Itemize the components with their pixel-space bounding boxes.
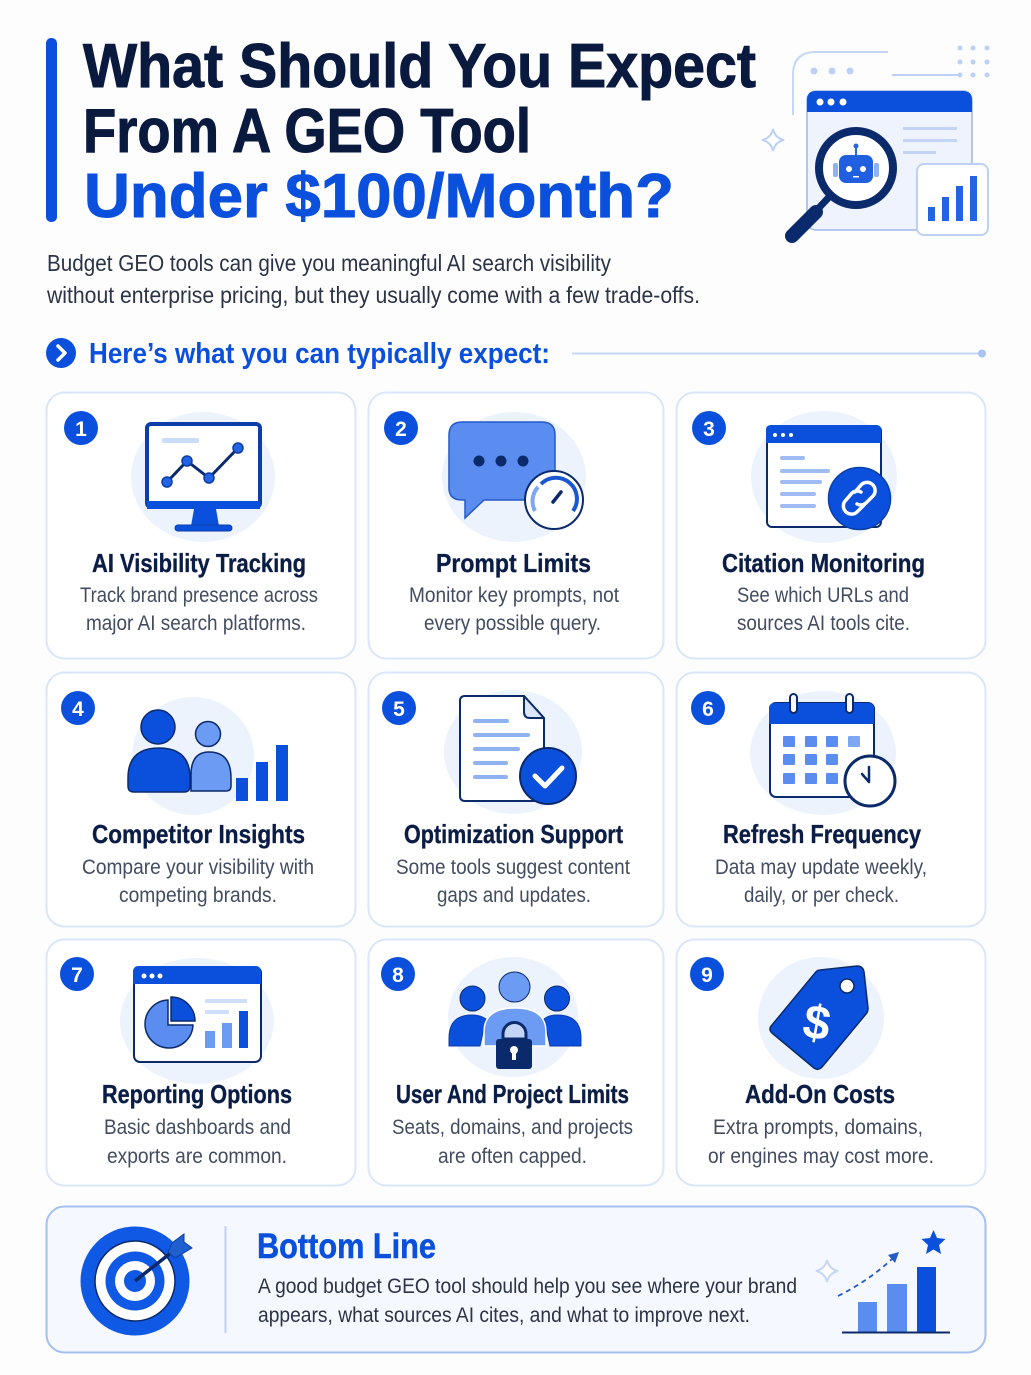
card 3 title: Citation Monitoring [722,548,925,578]
card 7 title: Reporting Options [102,1079,292,1109]
card 6 description: daily, or per check. [744,884,899,907]
badge 8: 8 [392,964,404,987]
badge 5 [382,691,416,725]
card 1 title: AI Visibility Tracking [92,548,306,578]
badge 6: 6 [702,698,714,721]
icon: page and link [751,411,897,543]
card 7 description: exports are common. [107,1145,287,1168]
badge 3: 3 [703,418,715,441]
card 9 description: or engines may cost more. [708,1145,934,1168]
icon: chat and gauge [442,412,586,542]
title: From A GEO Tool [83,97,531,166]
panel: card 7 [46,940,356,1186]
badge 8 [381,957,415,991]
icon: report window [120,958,274,1084]
card 2 description: every possible query. [424,612,601,635]
card 7 description [104,1116,291,1168]
card 5 description: gaps and updates. [437,884,591,907]
card 5 description: Some tools suggest content [396,856,630,879]
icon: document check [444,690,582,814]
section heading [46,338,986,370]
icon: team and lock [448,957,581,1077]
icon: growth bars [816,1230,950,1332]
intro text [46,250,700,308]
card 5 title: Optimization Support [404,819,623,849]
title accent bar [46,38,57,222]
card 6 description: Data may update weekly, [715,856,927,879]
badge 3 [692,411,726,445]
badge 9: 9 [701,964,713,987]
card 4 title: Competitor Insights [92,819,305,849]
card 8 description: are often capped. [438,1145,587,1168]
panel: card 5 [368,672,664,926]
card 9 title: Add-On Costs [745,1079,895,1109]
card 2 description: Monitor key prompts, not [409,584,619,607]
bottom line text: A good budget GEO tool should help you see where your brand [258,1274,797,1298]
card 9 description [708,1116,934,1168]
card 1 description [80,584,318,635]
icon: calendar and clock [750,691,896,815]
icon: price tag [758,957,884,1079]
panel: card 8 [368,940,664,1186]
card 5 description [396,856,630,907]
icon: target [80,1226,192,1336]
card 2 description [409,584,619,635]
card 8 title: User And Project Limits [396,1079,629,1109]
icon: price tag: $ [799,995,835,1052]
card 6 description [715,856,927,907]
panel: bottom line [46,1206,986,1352]
title: What Should You Expect [83,32,756,101]
card 1 description: major AI search platforms. [86,612,306,635]
card 1 description: Track brand presence across [80,584,318,607]
card 3 description [737,584,910,635]
panel: card 1 [46,392,356,658]
badge 1: 1 [75,418,87,441]
panel: card 4 [46,672,356,926]
card 3 description: See which URLs and [737,584,909,607]
title [83,32,756,231]
badge 4: 4 [72,698,84,721]
bottom line text [258,1274,797,1327]
card 2 title: Prompt Limits [436,548,591,578]
icon: people and bars [128,697,288,815]
badge 5: 5 [393,698,405,721]
title: Under $100/Month? [84,162,674,231]
intro text: Budget GEO tools can give you meaningful AI search visibility [47,250,611,276]
panel: card 2 [368,392,664,658]
card 9 description: Extra prompts, domains, [713,1116,923,1139]
badge 6 [691,691,725,725]
bottom line heading: Bottom Line [257,1227,436,1266]
panel: card 6 [676,672,986,926]
badge 9 [690,957,724,991]
badge 1 [64,411,98,445]
card 4 description: Compare your visibility with [82,856,314,879]
card 7 description: Basic dashboards and [104,1116,291,1139]
badge 2 [384,411,418,445]
card 8 description [392,1116,633,1168]
panel: card 3 [676,392,986,658]
badge 7 [60,957,94,991]
badge 4 [61,691,95,725]
card 6 title: Refresh Frequency [723,819,921,849]
card 4 description: competing brands. [119,884,277,907]
hero illustration [762,46,990,236]
bottom line text: appears, what sources AI cites, and what to improve next. [258,1303,750,1327]
card 4 description [82,856,314,907]
intro text: without enterprise pricing, but they usually come with a few trade-offs. [46,282,700,308]
badge 7: 7 [71,964,83,987]
card 3 description: sources AI tools cite. [737,612,910,635]
card 8 description: Seats, domains, and projects [392,1116,633,1139]
badge 2: 2 [395,418,407,441]
icon: monitor chart [131,412,275,542]
panel: card 9 [676,940,986,1186]
section heading: Here’s what you can typically expect: [89,338,550,370]
